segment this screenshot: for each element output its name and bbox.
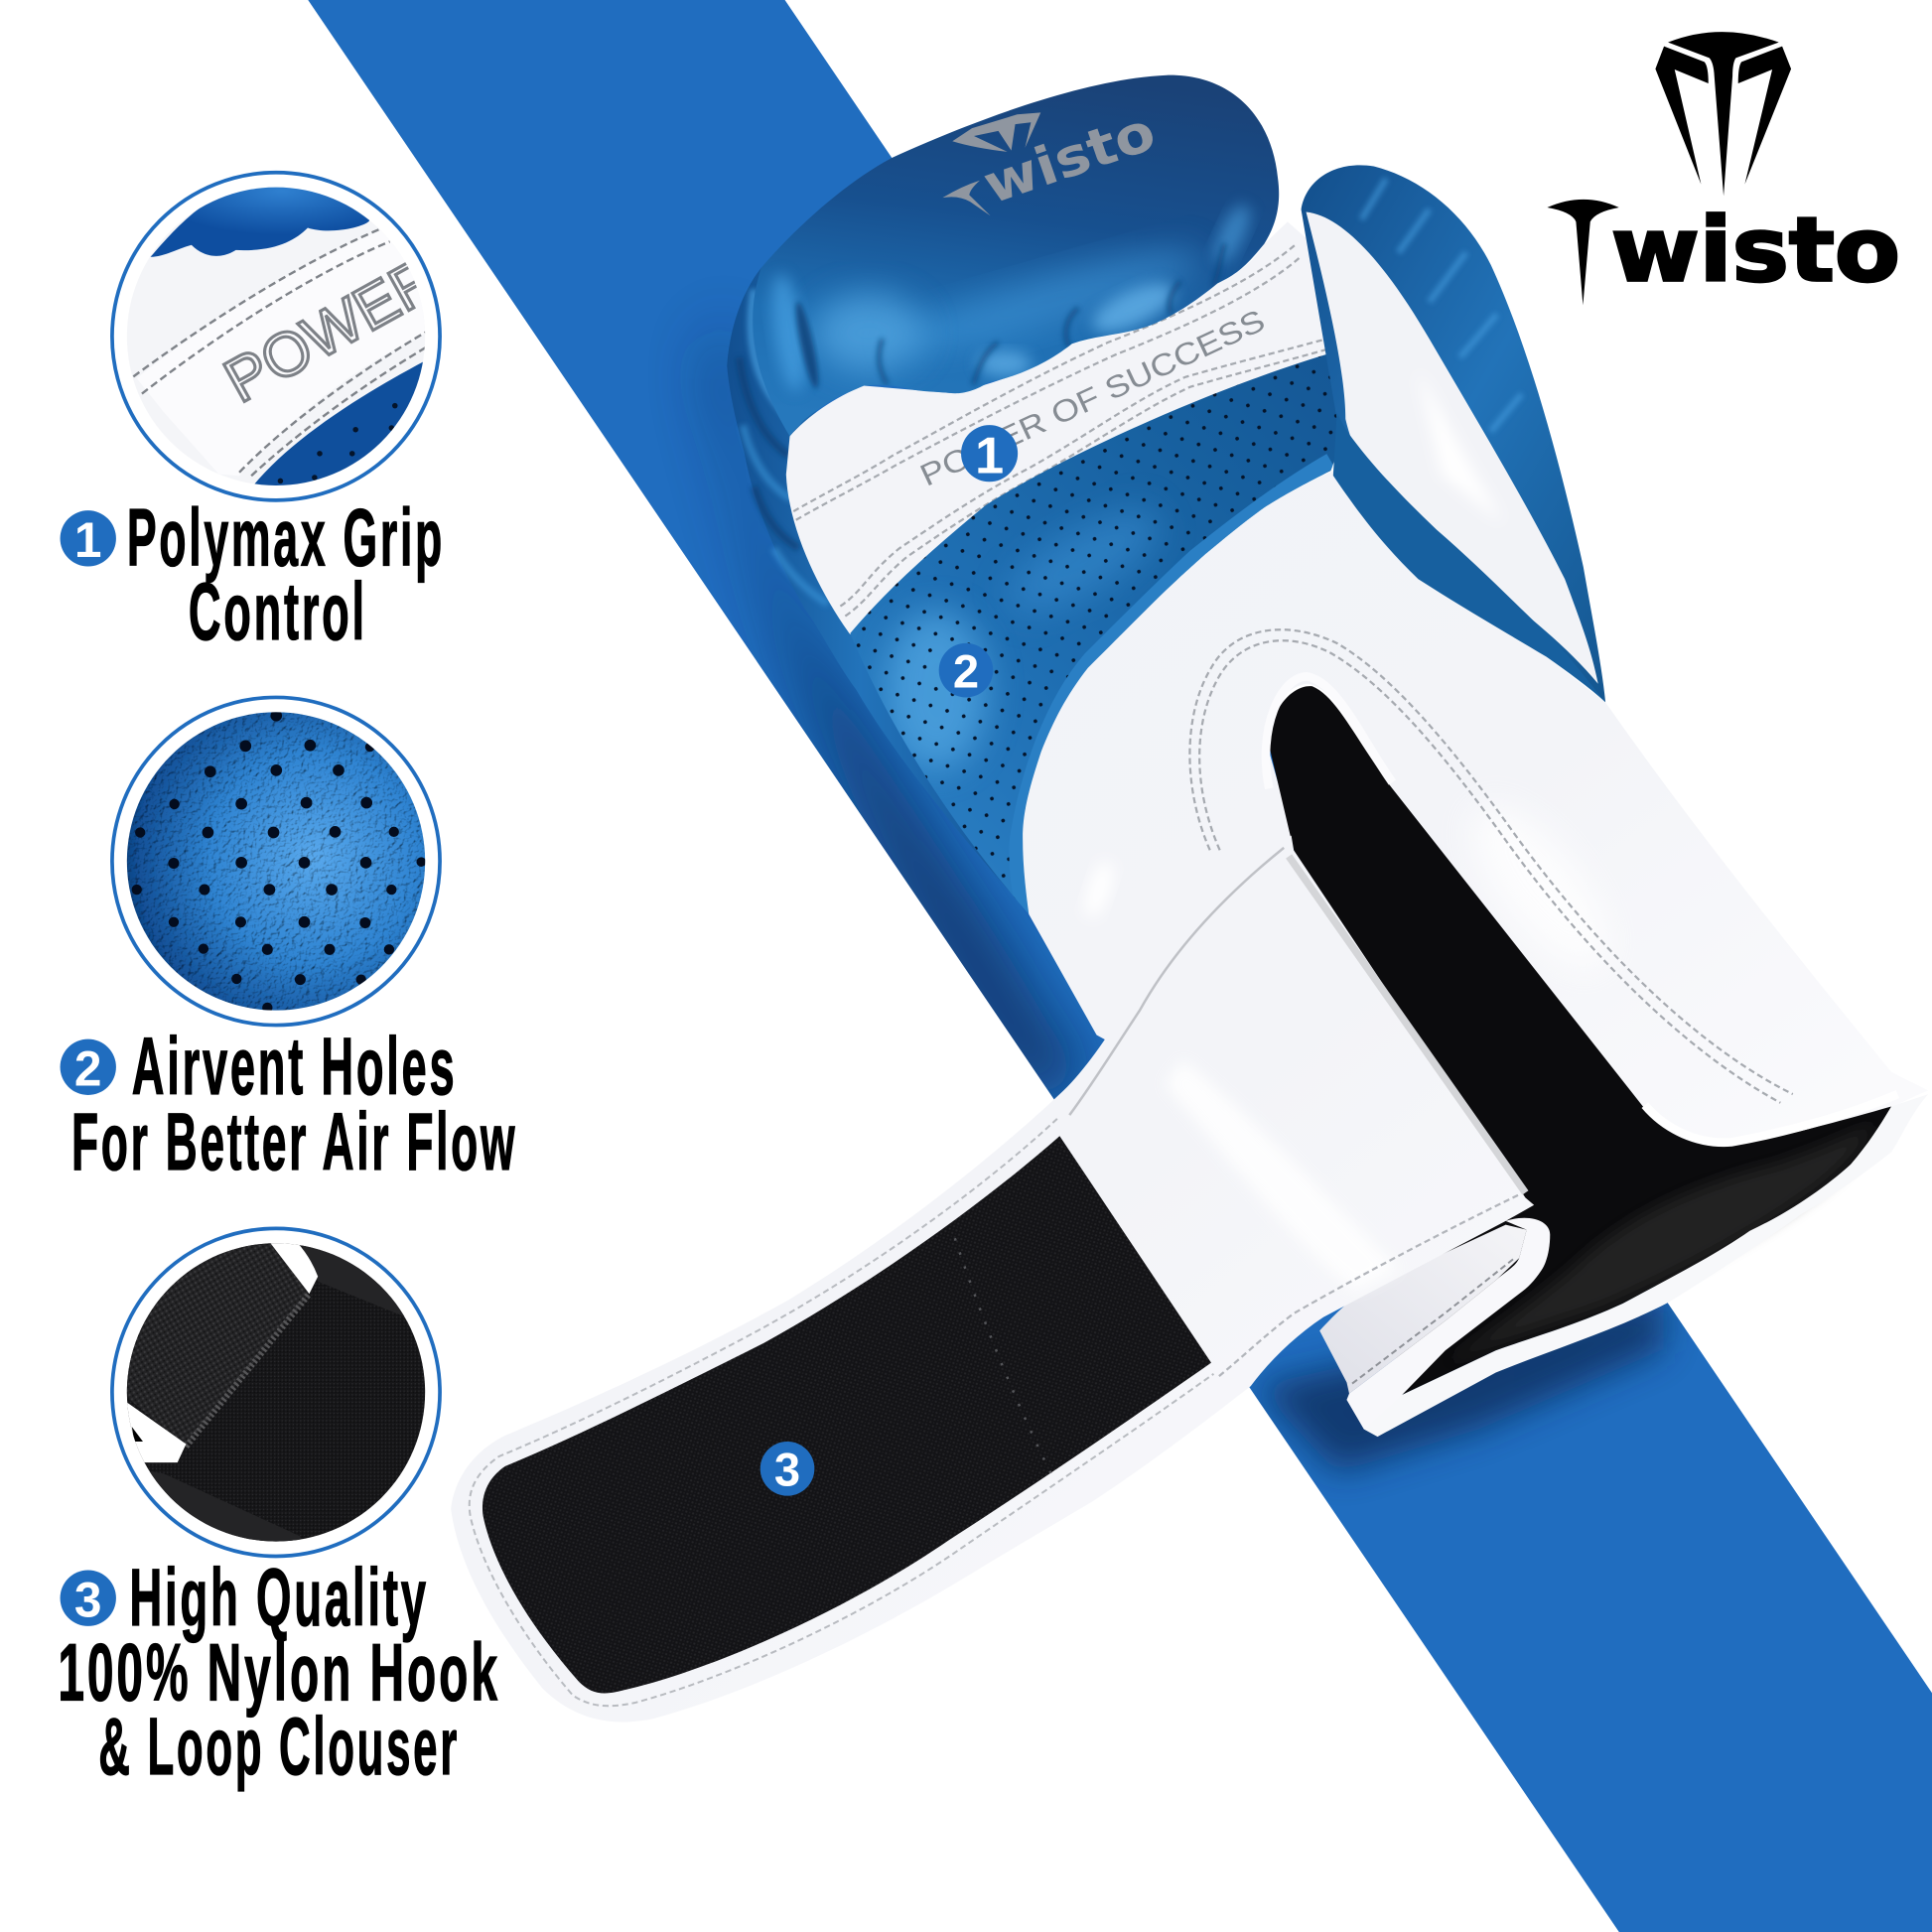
inner cuff — [1319, 1225, 1527, 1394]
fabric flap — [123, 1238, 310, 1447]
heading: High Quality 100% Nylon Hook & Loop Clouser: & Loop Clouser — [98, 1702, 460, 1792]
heading: Polymax Grip Control — [127, 493, 445, 657]
flap seam — [1069, 848, 1284, 1115]
velcro seam line — [955, 1238, 1053, 1478]
badge 1: 1 — [74, 512, 102, 568]
heading: High Quality 100% Nylon Hook & Loop Clouser — [58, 1553, 500, 1792]
glove gathered side — [727, 267, 1059, 918]
glove logo T — [942, 181, 991, 215]
stitching on white panel — [793, 244, 1338, 617]
glove logo helmet — [952, 112, 1040, 152]
glove badge 3: 3 — [774, 1444, 800, 1496]
heading: High Quality 100% Nylon Hook & Loop Clouser: 100% Nylon Hook — [58, 1628, 500, 1719]
heading: Airvent Holes For Better Air Flow: For Better Air Flow — [71, 1097, 517, 1187]
wordmark: wisto — [1611, 200, 1900, 303]
white upper panel — [786, 221, 1340, 634]
heading: Polymax Grip Control: Control — [189, 567, 367, 657]
black inner lining — [1269, 686, 1891, 1395]
panel: boxing glove — [451, 75, 1928, 1722]
heading: Airvent Holes For Better Air Flow: Airvent Holes — [132, 1022, 457, 1112]
heading: High Quality 100% Nylon Hook & Loop Clouser: High Quality — [129, 1553, 429, 1643]
detail photo 2 — [123, 710, 431, 1018]
strap stitching — [470, 1119, 1213, 1706]
badge 2: 2 — [74, 1040, 102, 1096]
opening rim — [1266, 676, 1392, 788]
glove badge 2: 2 — [953, 645, 979, 698]
badge 3 — [61, 1570, 116, 1627]
glove logo wordmark: wisto — [976, 101, 1163, 216]
glove badge 1: 1 — [975, 428, 1004, 485]
flap sheen — [1165, 1059, 1399, 1292]
power of success slogan: POWER OF SUCCESS — [914, 303, 1270, 493]
heading: Polymax Grip Control: Polymax Grip — [127, 493, 445, 584]
gather folds — [740, 290, 828, 604]
mesh lining — [1442, 1124, 1875, 1365]
ring 3 — [112, 1228, 440, 1556]
detail photo 3 — [123, 1232, 431, 1553]
detail photo 1: POWER — [213, 243, 450, 416]
thumb seam — [1333, 413, 1605, 702]
helmet emblem — [1655, 32, 1791, 196]
glove badge 2 — [939, 643, 993, 698]
badge 1 — [61, 510, 116, 568]
badge 3: 3 — [74, 1572, 102, 1627]
knuckle pad — [753, 75, 1279, 436]
glove badge 1 — [961, 425, 1018, 485]
panel: feature 2 — [61, 697, 517, 1187]
white palm — [1023, 471, 1928, 1146]
palm sheen — [1079, 785, 1632, 989]
thumb — [1302, 165, 1605, 702]
glove badge 3 — [760, 1442, 814, 1496]
detail photo 1 — [127, 187, 425, 485]
cuff edge — [1645, 1094, 1897, 1143]
glove logo — [942, 101, 1163, 216]
panel: feature 1 — [61, 173, 450, 657]
ring 2 — [112, 697, 440, 1026]
cuff side rim — [1346, 1218, 1550, 1430]
palm stitching — [1189, 629, 1793, 1103]
heading: Airvent Holes For Better Air Flow — [71, 1022, 517, 1187]
logo: Twisto — [1547, 32, 1900, 305]
hook and loop velcro patch — [483, 1136, 1211, 1693]
cuff stitching — [1350, 1259, 1513, 1385]
lower cuff rim — [1346, 1094, 1928, 1437]
strap with flap — [451, 835, 1534, 1722]
perforated blue panel — [850, 354, 1336, 913]
fabric edge — [1289, 857, 1525, 1192]
ring 1 — [112, 173, 440, 500]
panel: feature 3 — [58, 1228, 500, 1792]
white binding — [269, 1241, 318, 1294]
badge 2 — [61, 1039, 116, 1096]
